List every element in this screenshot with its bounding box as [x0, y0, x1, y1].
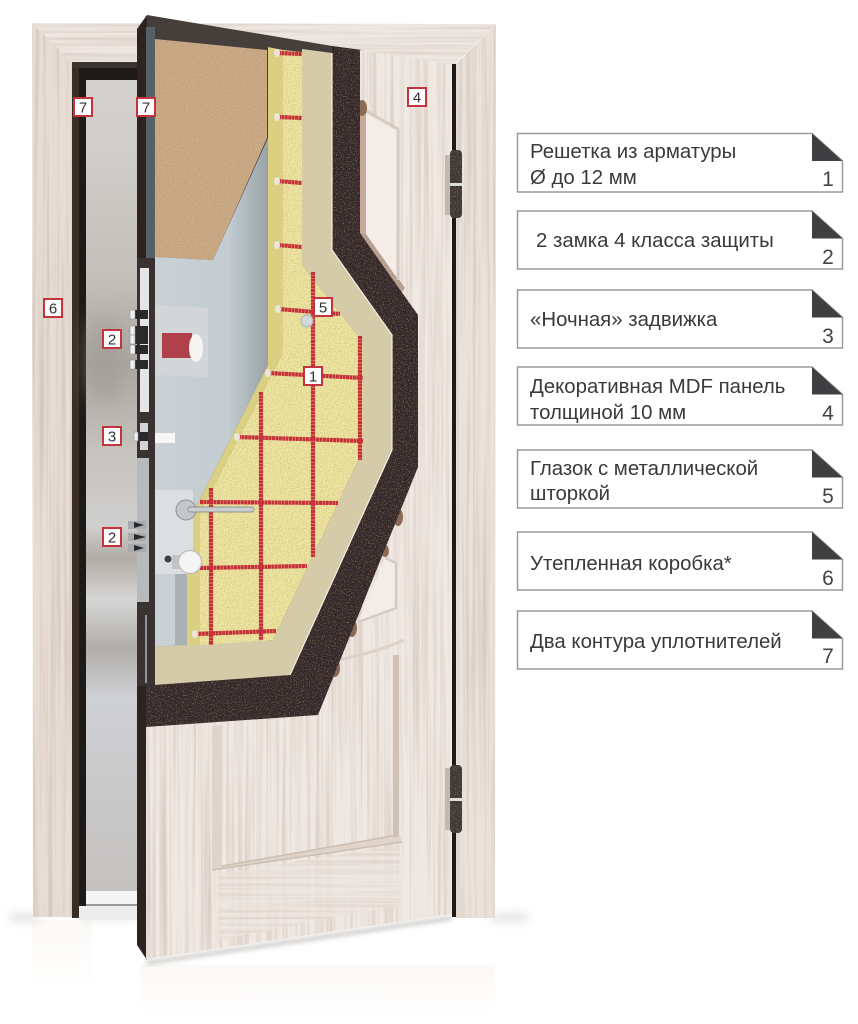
upper door panel moulding [360, 105, 405, 292]
legend card 3: «Ночная» задвижка [530, 309, 718, 331]
seal strip [146, 27, 155, 259]
callout badge 3 [103, 427, 121, 446]
legend card 6: 6 [822, 567, 834, 590]
frame top [32, 23, 496, 64]
foam side [187, 47, 283, 645]
door leaf [128, 15, 452, 960]
legend card 3 [518, 290, 842, 348]
floor reflection [32, 920, 495, 1015]
lower hinge [445, 765, 462, 833]
legend card 1: Ø до 12 мм [530, 167, 637, 189]
callout badge 2 lower [103, 528, 121, 546]
rebar grid [195, 53, 363, 645]
night latch [134, 423, 175, 450]
callout badge 4 [408, 88, 426, 106]
inner steel plate [155, 138, 268, 647]
kraft honeycomb filler [155, 39, 267, 260]
middle door panel moulding [338, 558, 404, 660]
legend card 5: 5 [822, 485, 834, 508]
callout badge 7 right [137, 98, 155, 116]
door edge [137, 15, 147, 960]
legend card 5 [518, 450, 842, 508]
legend card 7 [518, 611, 842, 669]
door frame [32, 23, 496, 920]
legend card 4: 4 [822, 402, 834, 425]
legend card 6 [518, 532, 842, 590]
legend card 3: 3 [822, 325, 834, 348]
lower lock strip [137, 458, 149, 602]
frame right post [456, 24, 496, 918]
board light edge [290, 53, 392, 675]
legend card 4: толщиной 10 мм [530, 402, 686, 424]
door inner top [147, 15, 362, 700]
legend card 5: шторкой [530, 483, 610, 505]
upper lock strip [140, 268, 149, 412]
callout badge 5: 5 [319, 300, 327, 316]
legend card 4 [518, 367, 842, 425]
upper lock bolts [130, 310, 148, 369]
callout badge 2 upper [103, 330, 121, 348]
callout badge 7 left [74, 98, 92, 116]
legend card 5: Глазок с металлической [530, 458, 758, 480]
beige insulation board [154, 49, 392, 685]
MDF panel [146, 50, 452, 959]
door lower seal [145, 615, 147, 683]
legend card 1: Решетка из арматуры [530, 141, 736, 163]
legend card 7: Два контура уплотнителей [530, 631, 782, 653]
rebar ends [192, 49, 281, 638]
callout badge 7 left: 7 [79, 100, 87, 116]
callout badge 2 lower: 2 [108, 530, 116, 546]
legend card 1 [518, 134, 842, 192]
lower door panel moulding [212, 655, 402, 870]
callout badge 1 [304, 367, 322, 386]
lower lock bolts [128, 521, 146, 552]
floor shadow [10, 915, 528, 965]
legend card 2: 2 замка 4 класса защиты [536, 230, 774, 252]
callout badge 2 upper: 2 [108, 332, 116, 348]
steel edge bumps [330, 100, 403, 677]
legend card 6: Утепленная коробка* [530, 553, 732, 575]
callout badge 4: 4 [413, 90, 421, 106]
foam insulation [200, 50, 363, 645]
legend card 4: Декоративная MDF панель [530, 376, 785, 398]
upper lock [155, 305, 208, 377]
upper hinge [445, 150, 462, 218]
callout badge 1: 1 [309, 368, 317, 386]
legend card 1: 1 [822, 168, 834, 191]
legend card 7: 7 [822, 645, 834, 668]
lower rail texture [218, 845, 400, 940]
steel sheet [146, 46, 418, 727]
callout badge 7 right: 7 [142, 100, 150, 116]
frame left post [32, 23, 72, 917]
callout badge 5 [314, 298, 332, 316]
glass opening [72, 62, 142, 920]
lower lock [155, 490, 254, 645]
legend card 2 [518, 211, 842, 269]
lock mount column [137, 258, 155, 686]
callout badge 6 [44, 299, 62, 318]
door viewer [301, 315, 313, 327]
callout badge 3: 3 [108, 428, 116, 446]
callout badge 6: 6 [49, 300, 57, 318]
legend card 2: 2 [822, 246, 834, 269]
